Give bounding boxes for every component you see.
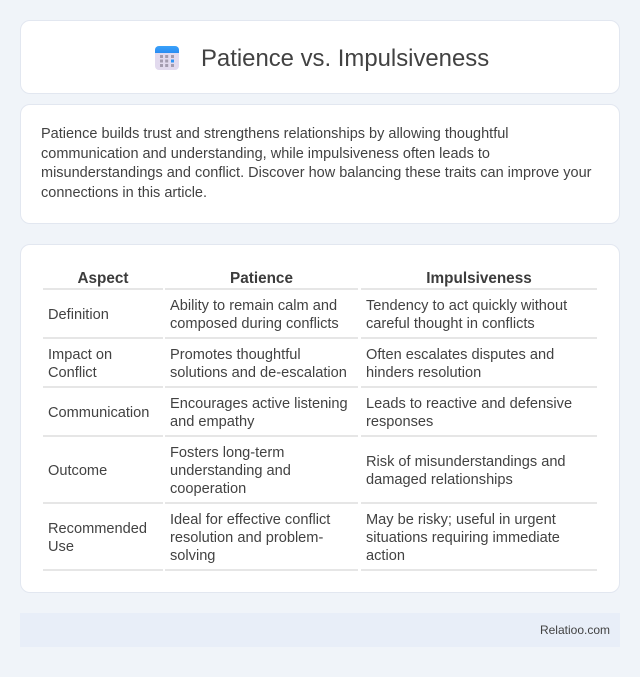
Impact: Impulsiveness — [366, 347, 554, 381]
Definition: Patience: composed during conflicts — [170, 316, 339, 332]
icon: calendar — [155, 46, 179, 70]
intro text: connections in this article. — [41, 184, 207, 200]
table panel — [20, 244, 620, 593]
intro text: communication and understanding, while impulsiveness often leads to — [41, 146, 490, 162]
row: Definition: Definition — [48, 307, 109, 323]
Communication: Impulsiveness: Leads to reactive and defensive — [366, 396, 572, 412]
row: Communication: Communication — [48, 405, 149, 421]
header panel — [20, 20, 620, 94]
Recommended Use: Impulsiveness: May be risky; useful in urgent — [366, 512, 556, 528]
table header: Patience: Patience — [230, 270, 293, 287]
row: Impact on Conflict: Conflict — [48, 365, 97, 381]
footer bar — [20, 613, 620, 647]
Definition: Patience — [170, 298, 339, 332]
Outcome: Patience: cooperation — [170, 481, 246, 497]
Outcome: Patience — [170, 445, 291, 497]
Recommended Use: Impulsiveness: situations requiring immediate — [366, 530, 560, 546]
Outcome: Impulsiveness — [366, 454, 566, 488]
Impact: Impulsiveness: hinders resolution — [366, 365, 481, 381]
intro panel — [20, 104, 620, 224]
row: Recommended Use: Use — [48, 539, 74, 555]
table header: Impulsiveness: Impulsiveness — [426, 270, 532, 287]
Recommended Use: Patience: Ideal for effective conflict — [170, 512, 330, 528]
Communication: Patience — [170, 396, 348, 430]
table header: Aspect: Aspect — [77, 270, 128, 287]
Communication: Patience: and empathy — [170, 414, 254, 430]
Outcome: Patience: Fosters long-term — [170, 445, 284, 461]
title: Patience vs. Impulsiveness — [201, 45, 489, 72]
Definition: Impulsiveness: careful thought in conflicts — [366, 316, 535, 332]
Impact: Patience — [170, 347, 347, 381]
Impact: Patience: Promotes thoughtful — [170, 347, 301, 363]
Communication: Impulsiveness — [366, 396, 572, 430]
Recommended Use: Patience — [170, 512, 330, 564]
row: Impact on Conflict: Impact on — [48, 347, 112, 363]
Communication: Impulsiveness: responses — [366, 414, 433, 430]
row: Impact on Conflict — [48, 347, 112, 381]
Recommended Use: Patience: solving — [170, 548, 215, 564]
footer text: Relatioo.com — [540, 623, 610, 637]
row: Outcome: Outcome — [48, 463, 107, 479]
intro text: misunderstandings and conflict. Discover how balancing these traits can improve your — [41, 165, 591, 181]
Recommended Use: Impulsiveness: action — [366, 548, 405, 564]
Communication: Patience: Encourages active listening — [170, 396, 348, 412]
Recommended Use: Impulsiveness — [366, 512, 560, 564]
Definition: Patience: Ability to remain calm and — [170, 298, 337, 314]
Impact: Impulsiveness: Often escalates disputes and — [366, 347, 554, 363]
Outcome: Patience: understanding and — [170, 463, 291, 479]
Definition: Impulsiveness: Tendency to act quickly without — [366, 298, 567, 314]
row: Recommended Use — [48, 521, 147, 555]
Impact: Patience: solutions and de-escalation — [170, 365, 347, 381]
Outcome: Impulsiveness: Risk of misunderstandings and — [366, 454, 566, 470]
Recommended Use: Patience: resolution and problem- — [170, 530, 323, 546]
row: Recommended Use: Recommended — [48, 521, 147, 537]
Definition: Impulsiveness — [366, 298, 568, 332]
intro text: Patience builds trust and strengthens relationships by allowing thoughtful — [41, 126, 509, 142]
Outcome: Impulsiveness: damaged relationships — [366, 472, 513, 488]
intro text — [41, 126, 592, 200]
